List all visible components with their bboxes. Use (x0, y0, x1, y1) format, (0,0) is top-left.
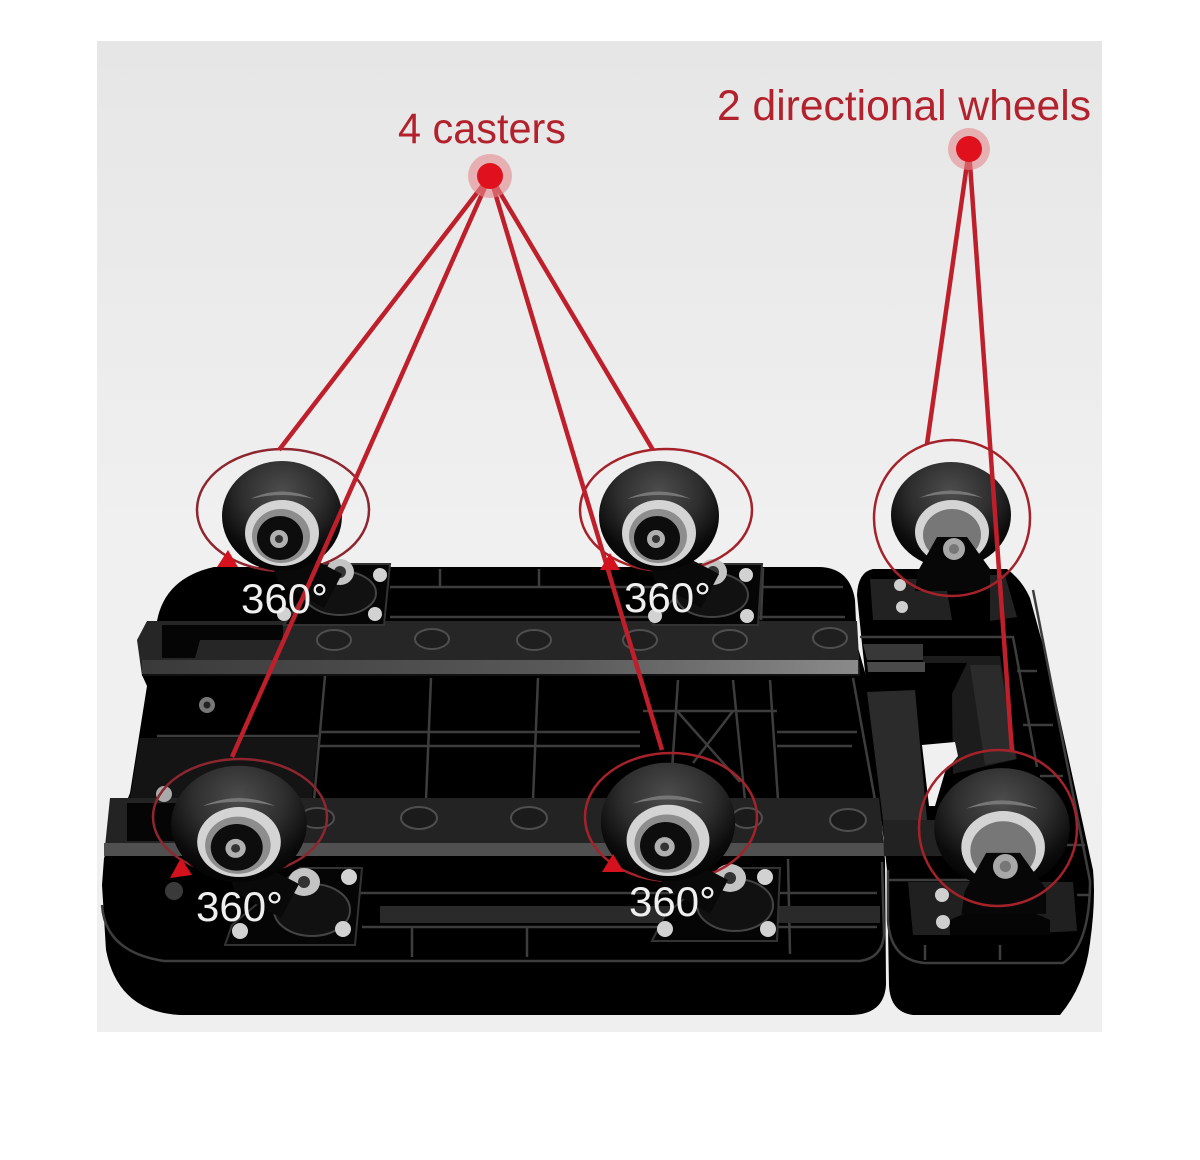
lower cross bar (104, 798, 884, 856)
label: 360 degrees top left: 360° (241, 575, 328, 622)
plate: top left (277, 559, 390, 625)
nuts and bolts (156, 697, 215, 900)
icon: rotation ring top middle (580, 449, 752, 571)
icon: rotation ring bottom left (153, 759, 327, 875)
icon: directional wheel top (891, 462, 1011, 591)
icon: caster fork bottom left (225, 858, 299, 918)
panel: main cart deck (102, 567, 886, 1015)
arrow: caster leader lines (232, 176, 662, 757)
deck ribs (102, 568, 884, 961)
icon: caster wheel top left (222, 461, 342, 571)
panel: grey photo backdrop (97, 41, 1102, 1032)
label: 360 degrees top middle: 360° (624, 574, 711, 621)
icon: rotation ring directional bottom (919, 750, 1077, 906)
plate: bottom middle (652, 864, 780, 941)
callout: 4 casters: 4 casters (398, 105, 566, 153)
strut (863, 644, 923, 660)
white cut-out in hinge (922, 742, 958, 806)
callout: 2 directional wheels: 2 directional wheels (717, 82, 1091, 130)
upper cross bar (137, 621, 860, 676)
icon: directional wheel bottom (934, 768, 1070, 914)
arm: folding hinge (923, 656, 1017, 774)
icon: caster fork top middle (645, 548, 719, 608)
callout: 2 directional wheels (717, 82, 1091, 170)
icon: rotation ring top left (197, 449, 369, 571)
icon: rotation arrowheads (170, 550, 624, 878)
panel: directional wheel deck (857, 569, 1094, 1015)
icon: caster wheel top middle (599, 461, 719, 571)
icon: caster fork bottom middle (654, 854, 728, 914)
casters mounting plates (225, 559, 780, 945)
label: 360 degrees bottom middle: 360° (629, 878, 716, 925)
plate: top middle (648, 559, 762, 625)
icon: caster wheel bottom left (171, 766, 307, 882)
plate: bottom left (225, 868, 362, 945)
directional mounting plates (870, 575, 1077, 935)
arrow: directional wheel leader lines (927, 150, 1012, 752)
label: 360 degrees bottom left: 360° (196, 883, 283, 930)
icon: rotation ring bottom middle (585, 753, 757, 881)
callout: 4 casters (398, 105, 566, 198)
icon: rotation ring directional top (874, 440, 1030, 596)
icon: caster fork top left (268, 548, 342, 608)
icon: caster wheel bottom middle (601, 763, 735, 881)
